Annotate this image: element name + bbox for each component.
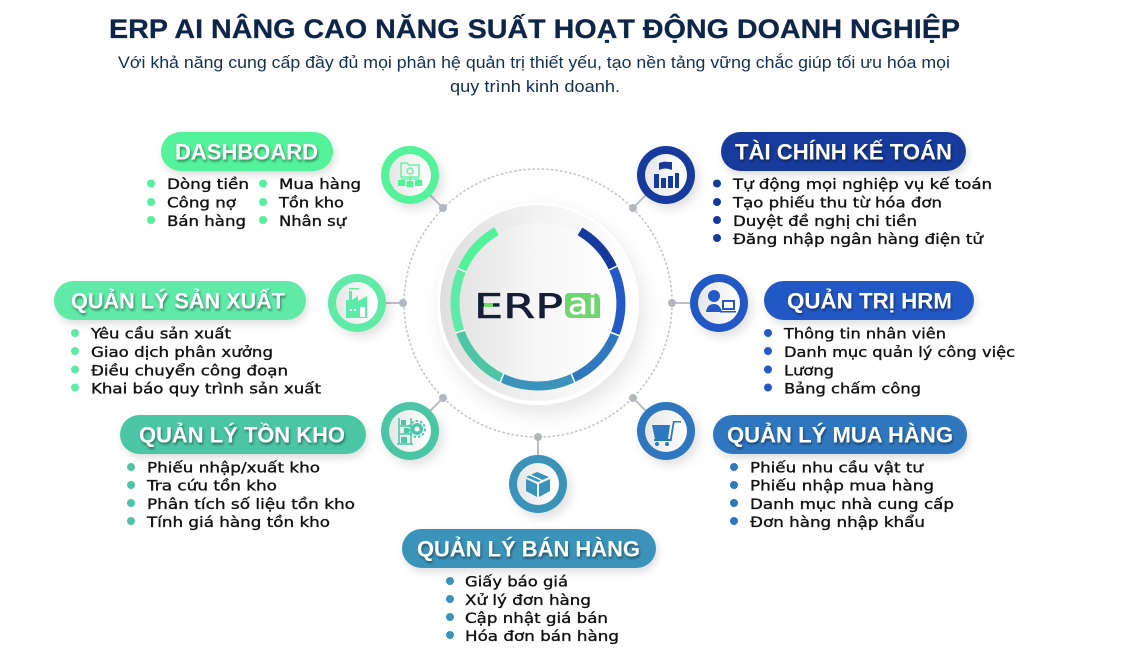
panel: sales management bbox=[402, 529, 656, 645]
heading: production bbox=[54, 281, 306, 320]
title: ERP AI NÂNG CAO NĂNG SUẤT HOẠT ĐỘNG DOANH NGHIỆP bbox=[109, 13, 960, 44]
list: finance items: Duyệt đề nghị chi tiền bbox=[733, 213, 917, 230]
list: production items bbox=[71, 326, 321, 398]
heading: purchasing bbox=[713, 415, 967, 454]
icon: production factory bbox=[328, 274, 386, 332]
list: dashboard items: Công nợ bbox=[167, 196, 236, 212]
list: inventory items: Phân tích số liệu tồn kho bbox=[147, 496, 355, 513]
heading: sales: QUẢN LÝ BÁN HÀNG bbox=[417, 536, 640, 562]
heading: sales bbox=[402, 529, 656, 568]
heading: finance bbox=[721, 132, 966, 171]
subtitle: Với khả năng cung cấp đầy đủ mọi phân hệ quản trị thiết yếu, tạo nền tảng vững chắc giúp tối ưu hóa mọi bbox=[118, 53, 950, 72]
list: dashboard items: Mua hàng bbox=[279, 177, 361, 193]
subtitle bbox=[118, 53, 950, 96]
central disc bbox=[437, 203, 639, 405]
heading: finance: TÀI CHÍNH KẾ TOÁN bbox=[735, 140, 952, 164]
panel: finance and accounting bbox=[713, 132, 992, 248]
heading: purchasing: QUẢN LÝ MUA HÀNG bbox=[727, 422, 953, 448]
logo: ERP ai bbox=[474, 287, 600, 327]
list: production items: Yêu cầu sản xuất bbox=[90, 326, 231, 342]
list: dashboard items: Bán hàng bbox=[167, 214, 246, 230]
panel: production management bbox=[54, 281, 321, 398]
heading: HRM: QUẢN TRỊ HRM bbox=[787, 288, 952, 314]
list: HRM items: Thông tin nhân viên bbox=[783, 326, 946, 342]
heading: HRM bbox=[764, 281, 974, 320]
icon: finance chart and money bbox=[637, 146, 695, 204]
list: dashboard items: Nhân sự bbox=[279, 214, 347, 230]
heading: inventory: QUẢN LÝ TỒN KHO bbox=[139, 422, 345, 448]
list: HRM items: Danh mục quản lý công việc bbox=[784, 345, 1015, 361]
list: production items: Điều chuyển công đoạn bbox=[91, 362, 288, 380]
list: finance items bbox=[713, 176, 992, 248]
list: sales items: Cập nhật giá bán bbox=[465, 611, 608, 627]
list: dashboard items: Dòng tiền bbox=[167, 176, 249, 193]
list: HRM items bbox=[764, 326, 1015, 398]
list: production items: Khai báo quy trình sản xuất bbox=[91, 382, 321, 398]
list: finance items: Đăng nhập ngân hàng điện tử bbox=[733, 232, 984, 248]
list: purchasing items: Phiếu nhập mua hàng bbox=[750, 478, 934, 494]
icon: warehouse shelves and gear bbox=[381, 402, 439, 460]
list: inventory items bbox=[127, 460, 355, 531]
list: production items: Giao dịch phân xưởng bbox=[91, 345, 273, 361]
list: inventory items: Tính giá hàng tồn kho bbox=[146, 514, 330, 531]
panel: purchasing management bbox=[713, 415, 967, 531]
list: dashboard items bbox=[147, 176, 361, 230]
list: sales items: Hóa đơn bán hàng bbox=[465, 629, 619, 645]
list: sales items: Giấy báo giá bbox=[465, 574, 568, 590]
heading: dashboard bbox=[161, 132, 333, 171]
list: dashboard items: Tồn kho bbox=[278, 194, 344, 212]
segmented ring bbox=[455, 231, 621, 386]
list: sales items: Xử lý đơn hàng bbox=[465, 593, 591, 609]
list: finance items: Tạo phiếu thu từ hóa đơn bbox=[732, 194, 942, 212]
list: purchasing items: Đơn hàng nhập khẩu bbox=[750, 514, 925, 531]
list: purchasing items bbox=[730, 460, 954, 531]
icon: sales box bbox=[509, 455, 567, 513]
panel: inventory management bbox=[120, 415, 366, 531]
icon: dashboard folder network bbox=[381, 146, 439, 204]
list: inventory items: Phiếu nhập/xuất kho bbox=[147, 460, 320, 476]
panel: HRM bbox=[764, 281, 1015, 398]
list: sales items bbox=[446, 574, 619, 645]
panel: dashboard bbox=[147, 132, 361, 230]
list: HRM items: Lương bbox=[784, 364, 834, 380]
heading: dashboard: DASHBOARD bbox=[175, 140, 318, 164]
list: inventory items: Tra cứu tồn kho bbox=[146, 478, 277, 494]
icon: HRM person with laptop bbox=[690, 274, 748, 332]
subtitle: quy trình kinh doanh. bbox=[450, 77, 620, 96]
list: HRM items: Bảng chấm công bbox=[784, 382, 921, 398]
heading: production: QUẢN LÝ SẢN XUẤT bbox=[71, 288, 286, 314]
logo: ERP ai: ERP bbox=[474, 287, 563, 327]
icon: shopping cart bbox=[637, 402, 695, 460]
list: finance items: Tự động mọi nghiệp vụ kế toán bbox=[732, 176, 992, 193]
heading: inventory bbox=[120, 415, 366, 454]
list: purchasing items: Phiếu nhu cầu vật tư bbox=[750, 460, 924, 476]
logo: ERP ai: ai bbox=[568, 287, 597, 321]
list: purchasing items: Danh mục nhà cung cấp bbox=[750, 497, 954, 513]
